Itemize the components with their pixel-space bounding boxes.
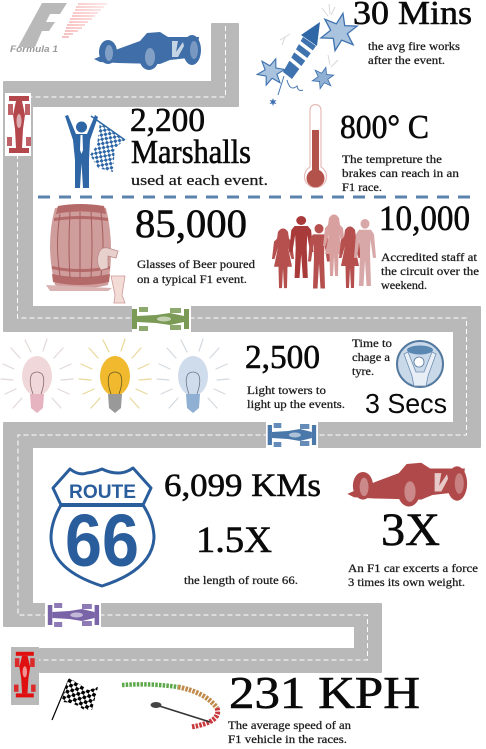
stat: 85,000 beer <box>135 201 255 286</box>
stat: 10,000 staff <box>379 198 479 292</box>
race car: bright red on grid <box>11 647 39 705</box>
stat: 231 kph: 231 KPH <box>229 667 420 718</box>
stat: tyre change time: 3 Secs <box>365 388 447 419</box>
icon: thermometer <box>304 104 327 188</box>
stat: 3X force: 3X <box>381 504 440 556</box>
icon: red race car <box>347 463 467 506</box>
stat: 800 C brakes: F1 race. <box>342 182 382 194</box>
icon: route 66 shield: 66 <box>65 499 139 582</box>
stat: 6,099 kms: 1.5X <box>196 520 272 561</box>
stat: 800 C brakes: brakes can reach in an <box>342 168 459 180</box>
stat: 10,000 staff: Accredited staff at <box>381 252 478 264</box>
stat: 800 C brakes: 800° C <box>340 109 429 146</box>
icon: fireworks rocket <box>255 4 359 106</box>
stat: 3X force: An F1 car excerts a force <box>348 563 478 575</box>
stat: 2,200 marshalls: Marshalls <box>131 134 251 171</box>
stat: 85,000 beer: Glasses of Beer poured <box>137 259 255 271</box>
stat: 6,099 kms <box>164 468 321 587</box>
stat: 3X force <box>348 504 478 589</box>
stat: 231 kph <box>228 667 420 746</box>
icon: yellow light bulb <box>79 339 151 413</box>
stat: tyre change time <box>352 338 447 419</box>
icon: beer barrel <box>46 204 125 303</box>
stat: 6,099 kms: the length of route 66. <box>184 575 298 587</box>
stat: 30 mins fireworks: the avg fire works <box>368 41 461 53</box>
stat: 85,000 beer: 85,000 <box>135 201 247 246</box>
icon: speedometer gauge <box>122 684 218 727</box>
stat: 2,500 light towers: Light towers to <box>247 385 326 397</box>
stat: 10,000 staff: the circuit over the <box>381 266 479 278</box>
icon: pink light bulb <box>1 339 73 413</box>
stat: 6,099 kms: 6,099 KMs <box>164 468 321 504</box>
stat: 800 C brakes: The tempreture the <box>342 154 442 166</box>
stat: 10,000 staff: 10,000 <box>379 198 470 238</box>
race car: green top view <box>132 306 191 332</box>
Formula 1 logo <box>10 3 107 54</box>
stat: tyre change time: Time to <box>352 338 392 350</box>
stat: 30 mins fireworks <box>353 0 472 67</box>
stat: 2,200 marshalls: used at each event. <box>131 173 268 189</box>
race car: purple top view <box>45 601 101 628</box>
stat: 2,500 light towers: light up the events. <box>247 399 345 411</box>
stat: 231 kph: The average speed of an <box>228 720 351 732</box>
icon: tyre change <box>397 341 443 387</box>
Formula 1 logo: Formula 1 <box>10 44 58 54</box>
icon: blue light bulb <box>157 339 229 413</box>
stat: 30 mins fireworks: after the event. <box>368 55 445 67</box>
stat: 2,500 light towers: 2,500 <box>245 339 320 376</box>
stat: tyre change time: tyre. <box>352 366 374 378</box>
stat: 800 C brakes <box>340 109 459 194</box>
stat: 231 kph: F1 vehicle in the races. <box>228 734 347 746</box>
stat: tyre change time: chage a <box>352 352 390 364</box>
stat: 85,000 beer: on a typical F1 event. <box>137 274 247 286</box>
stat: 2,200 marshalls: 2,200 <box>130 102 205 139</box>
icon: route 66 shield <box>51 468 154 586</box>
icon: route 66 shield: ROUTE <box>69 482 136 503</box>
stat: 3X force: 3 times its own weight. <box>348 577 465 589</box>
icon: crowd of staff <box>272 214 376 288</box>
race car: blue top view <box>266 421 318 448</box>
icon: checkered flag <box>52 678 98 720</box>
stat: 2,500 light towers <box>245 339 345 411</box>
stat: 10,000 staff: weekend. <box>381 280 427 292</box>
icon: marshal with flag <box>65 115 125 188</box>
race car: red top view <box>5 93 31 156</box>
icon: blue race car <box>94 32 201 70</box>
stat: 2,200 marshalls <box>130 102 268 189</box>
